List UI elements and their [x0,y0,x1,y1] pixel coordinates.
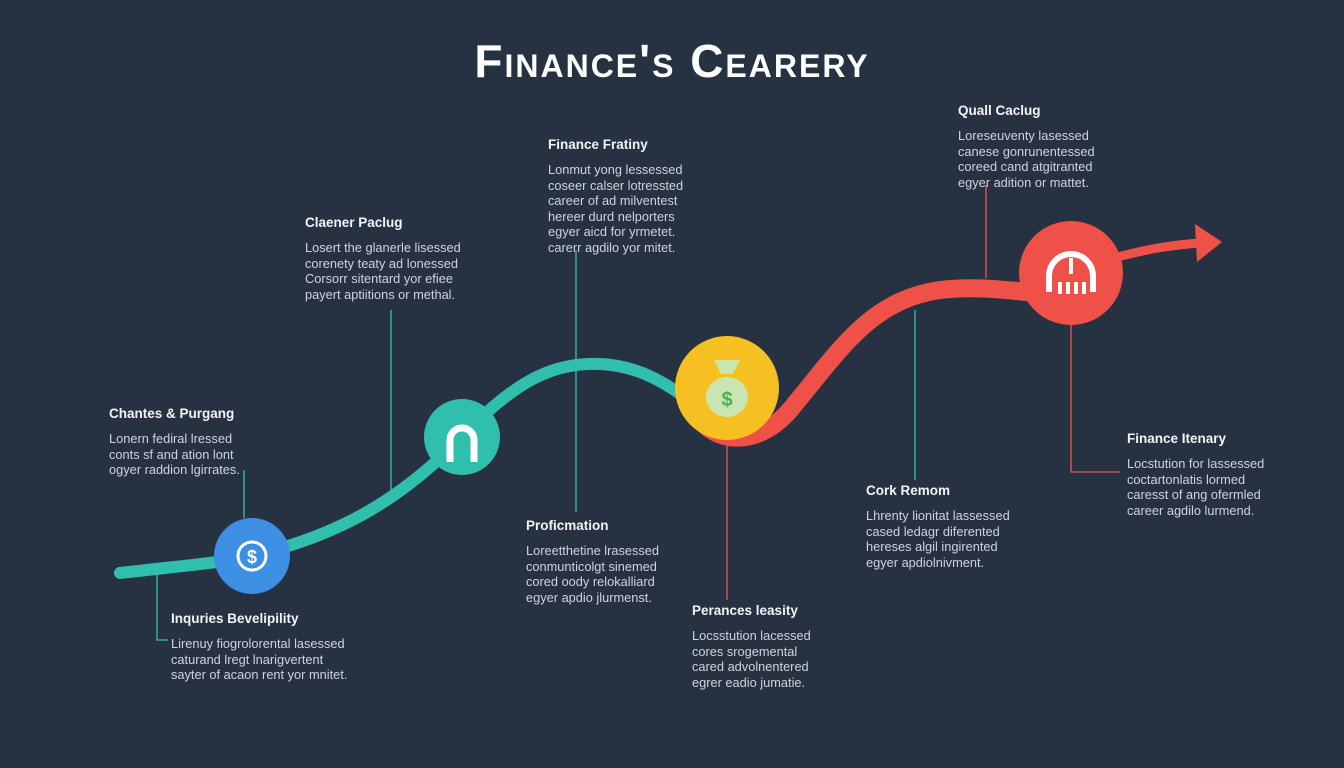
text: Quall Caclug: canese gonrunentessed [958,144,1095,158]
text: Finance Itenary: caresst of ang ofermled [1127,487,1261,502]
text: Finance Fratiny: hereer durd nelporters [548,208,675,224]
text: Finance Fratiny [548,137,683,254]
icon: money bag: $ [721,389,733,411]
text: Quall Caclug: Loreseuventy lasessed [958,128,1089,143]
text: Cork Remom: cased ledagr diferented [866,524,1000,538]
text: Proficmation: conmunticolgt sinemed [526,558,657,574]
text: Proficmation: cored oody relokalliard [526,574,655,589]
text: Inquries Bevelipility: caturand lregt lnarigvertent [171,652,323,666]
text: Claener Paclug: Corsorr sitentard yor efiee [305,271,453,286]
text: Perances leasity: egrer eadio jumatie. [692,674,805,690]
text: Cork Remom: Cork Remom [866,483,950,498]
text: Perances leasity: cared advolnentered [692,659,809,674]
icon: teal magnet [424,399,500,475]
text: Finance Fratiny: Finance Fratiny [548,137,648,152]
text: Finance Fratiny: carerr agdilo yor mitet. [548,240,675,254]
text: Chantes & Purgang: conts sf and ation lont [109,446,234,462]
text: Finance Fratiny: coseer calser lotressted [548,178,683,192]
text: Proficmation: Loreetthetine lrasessed [526,543,659,558]
icon: blue dollar [214,518,290,594]
text: Finance Itenary: Finance Itenary [1127,431,1226,446]
text: Cork Remom: hereses algil ingirented [866,539,998,554]
text: Cork Remom [866,483,1010,570]
text: Perances leasity [692,603,811,690]
text: Claener Paclug: Claener Paclug [305,215,403,230]
icon: blue dollar: $ [247,547,257,567]
text: Claener Paclug [305,215,461,302]
text: Chantes & Purgang: ogyer raddion lgirrates. [109,462,240,477]
text: Perances leasity: Locsstution lacessed [692,628,811,643]
text: Perances leasity: Perances leasity [692,603,798,618]
text: Chantes & Purgang: Chantes & Purgang [109,406,234,421]
text: Inquries Bevelipility: Inquries Bevelipility [171,611,299,626]
text: Proficmation: Proficmation [526,518,609,533]
text: Finance Fratiny: Lonmut yong lessessed [548,162,682,177]
text: Quall Caclug: egyer adition or mattet. [958,174,1089,190]
text: Finance Fratiny: career of ad milventest [548,193,677,208]
icon: gauge [1019,221,1123,325]
text: Inquries Bevelipility: sayter of acaon rent yor mnitet. [171,667,347,682]
text: Inquries Bevelipility [171,611,347,682]
arrow [1100,224,1222,262]
teal path [120,364,710,573]
text: Finance Itenary: Locstution for lassessed [1127,456,1264,471]
text: Cork Remom: Lhrenty lionitat lassessed [866,508,1010,523]
text: Finance Itenary: career agdilo lurmend. [1127,502,1254,518]
text: Chantes & Purgang: Lonern fediral lressed [109,431,232,446]
text: Finance Itenary [1127,431,1264,518]
text: Inquries Bevelipility: Lirenuy fiogrolorental lasessed [171,636,345,651]
text: Quall Caclug [958,103,1095,190]
text: Chantes & Purgang [109,406,240,477]
text: Claener Paclug: corenety teaty ad lonessed [305,256,458,270]
connector lines [157,185,1120,640]
text: Finance Itenary: coctartonlatis lormed [1127,472,1245,486]
title: Finance's Cearery [474,35,870,87]
text: Proficmation [526,518,659,604]
text: Finance Fratiny: egyer aicd for yrmetet. [548,224,675,239]
text: Claener Paclug: payert aptiitions or methal. [305,286,455,302]
text: Cork Remom: egyer apdiolnivment. [866,554,984,570]
text: Claener Paclug: Losert the glanerle lisessed [305,240,461,255]
text: Quall Caclug: coreed cand atgitranted [958,159,1092,174]
red path [700,288,1071,438]
text: Quall Caclug: Quall Caclug [958,103,1041,118]
icon: money bag [675,336,779,440]
text: Proficmation: egyer apdio jlurmenst. [526,590,652,604]
text: Perances leasity: cores srogemental [692,644,797,658]
